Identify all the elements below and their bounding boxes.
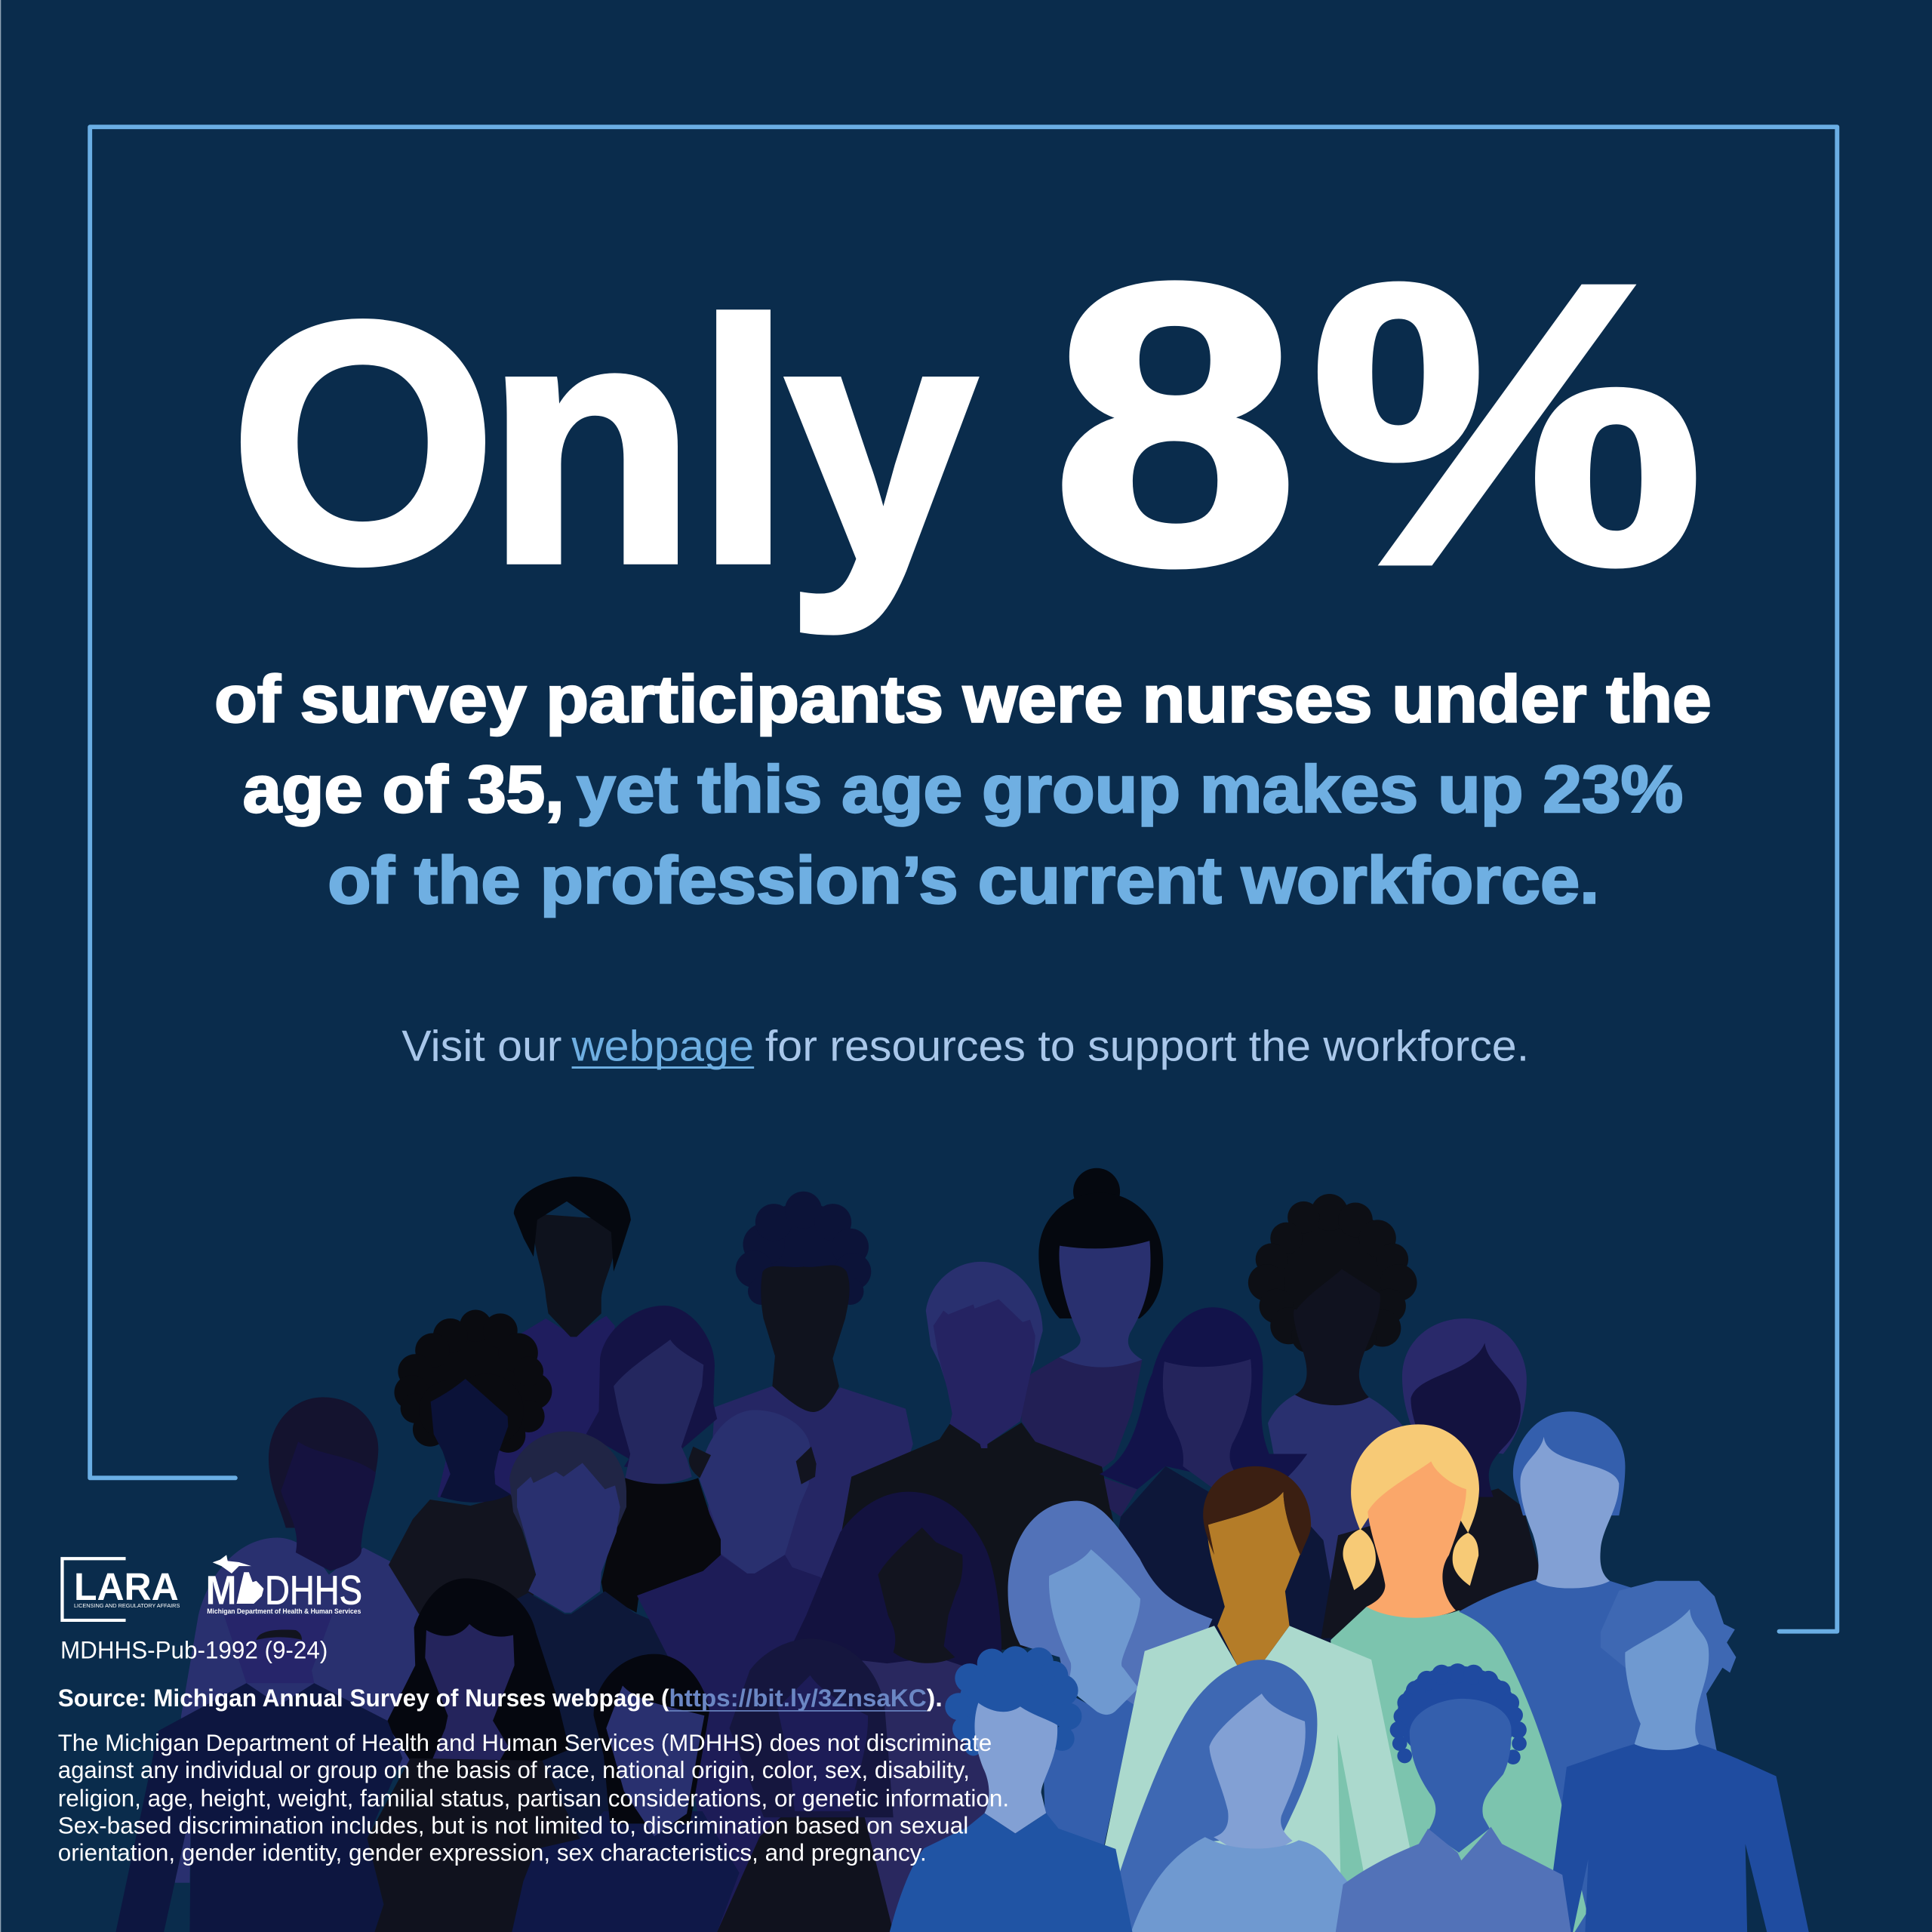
subheading statistic — [214, 662, 1712, 918]
LARA logo: LICENSING AND REGULATORY AFFAIRS — [74, 1602, 180, 1609]
source line: Source: Michigan Annual Survey of Nurses webpage ( — [58, 1684, 669, 1712]
person: blonde nurse with pigtails — [1343, 1424, 1479, 1618]
person: dark figure bottom centre — [717, 1638, 894, 1932]
person: bottom-right nurse with tousled hair — [1545, 1581, 1809, 1932]
person: brown-skinned nurse in mint coat — [1084, 1466, 1601, 1932]
publication number: MDHHS-Pub-1992 (9-24) — [60, 1636, 328, 1664]
MDHHS logo: M — [206, 1568, 236, 1614]
headline: Only 8% — [230, 202, 1703, 647]
hairline mark — [257, 1629, 302, 1640]
non-discrimination statement: religion, age, height, weight, familial status, partisan considerations, or genetic information. — [58, 1784, 1009, 1811]
person: back man with short dark hair — [438, 1177, 631, 1509]
non-discrimination statement: Sex-based discrimination includes, but is not limited to, discrimination based on sexual — [58, 1811, 968, 1838]
person: woman behind centre-left with long hair — [586, 1306, 721, 1613]
subheading statistic: of survey participants were nurses under the — [214, 662, 1712, 737]
face of hair-covered figure — [224, 1615, 332, 1683]
person: centre back man — [926, 1262, 1043, 1448]
person: right man with blue hair — [1459, 1411, 1725, 1932]
person: front woman in blue top — [1115, 1660, 1348, 1932]
LARA logo — [62, 1558, 180, 1620]
blue frame — [90, 127, 1837, 1632]
subheading statistic: yet this age group makes up 23% — [577, 752, 1683, 826]
person: woman with bun — [1021, 1168, 1163, 1469]
person: blue long-haired woman — [1008, 1501, 1213, 1885]
non-discrimination statement: orientation, gender identity, gender expression, sex characteristics, and pregnancy. — [58, 1838, 927, 1866]
person: woman with black long hair — [368, 1578, 580, 1932]
person: bald man with ears — [637, 1410, 900, 1932]
person: curly haired figure upper right — [1248, 1194, 1478, 1626]
illustration: crowd of nurses — [115, 1168, 1809, 1932]
icon: Michigan silhouette — [213, 1555, 263, 1604]
MDHHS logo — [206, 1555, 362, 1615]
LARA logo: LARA — [74, 1565, 179, 1608]
person: curly haired figure top centre — [703, 1192, 913, 1601]
headline: Only 8%: Only — [230, 252, 978, 635]
call to action: visit webpage: for resources to support the workforce. — [765, 1023, 1529, 1071]
person: woman with black hair bottom centre-left — [512, 1654, 740, 1932]
source line: ). — [927, 1684, 943, 1712]
person: woman with long dark hair, upper right — [1097, 1307, 1343, 1651]
person: bottom curly-haired person at left of blue group — [890, 1646, 1132, 1932]
person: man behind bottom left — [175, 1397, 493, 1883]
person: man in dark suit — [841, 1423, 1140, 1651]
source line: https://bit.ly/3ZnsaKC — [669, 1684, 927, 1712]
person: woman with dark face and wide hair — [789, 1492, 1023, 1932]
MDHHS logo: Michigan Department of Health & Human Services — [207, 1607, 361, 1615]
person: woman with big curly black hair — [389, 1310, 552, 1614]
headline: Only 8%: 8% — [1052, 202, 1703, 647]
non-discrimination statement: The Michigan Department of Health and Human Services (MDHHS) does not discriminate — [58, 1729, 992, 1756]
call to action: visit webpage: webpage — [571, 1023, 754, 1071]
non-discrimination statement — [58, 1729, 1009, 1866]
person: front curly haired figure — [1336, 1663, 1571, 1932]
call to action: visit webpage: Visit our — [401, 1023, 561, 1071]
MDHHS logo: DHHS — [265, 1568, 362, 1614]
subheading statistic: of the profession’s current workforce. — [328, 843, 1599, 918]
subheading statistic: age of 35, — [243, 752, 565, 826]
person: bottom-left navy figure — [115, 1683, 402, 1932]
person: man with grey hair — [438, 1432, 697, 1932]
person: woman with swept hair behind blonde — [1321, 1318, 1545, 1638]
non-discrimination statement: against any individual or group on the basis of race, national origin, color, sex, disability, — [58, 1756, 970, 1783]
call to action: visit webpage — [401, 1023, 1529, 1071]
